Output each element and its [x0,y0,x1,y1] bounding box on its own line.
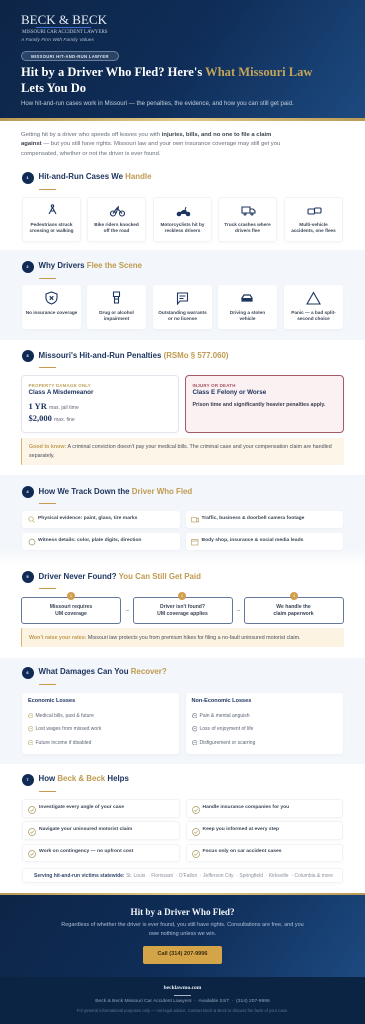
card: stolen vehicle: vehicle [240,316,255,321]
title: Lets You Do [21,80,86,94]
step 2 box: UM coverage applies [157,611,208,617]
eyebrow pill: MISSOURI HIT-AND-RUN LAWYER [31,54,109,58]
heading: Driver Never Found? You Can Still Get Paid [38,572,201,580]
card: multi-vehicle: Multi-vehicle [299,222,328,227]
icon: folder [191,539,198,546]
stat: jail time: 1 YR max. jail time [28,401,79,411]
step 3 number [290,592,298,600]
benefit: investigate [22,799,180,818]
panel: felony: Class E Felony or Worse [192,389,266,396]
intro paragraph: against — but you still have rights. Missouri law and your own insurance coverage may still get you [21,141,280,147]
card: no insurance: No insurance coverage [26,310,77,315]
CTA text: Regardless of whether the driver is ever found, you still have rights. Consultations are free, and you [61,922,304,928]
card: multi-vehicle: accidents, one flees [291,228,336,233]
heading: How Beck & Beck Helps [38,774,129,783]
CTA text: owe nothing unless we win. [149,931,216,937]
step 2 box: Driver isn't found? [160,604,205,610]
card: panic: Panic — a bad split- [291,310,336,315]
card: stolen vehicle: Driving a stolen [230,310,265,315]
intro paragraph [21,132,280,157]
card: panic: second choice [297,316,330,321]
list item: pain: Pain & mental anguish [200,712,250,718]
benefit: insurance companies [186,799,343,818]
step 1 number [67,592,75,600]
section 1: cases we handle [22,172,343,242]
subtitle: How hit-and-run cases work in Missouri — the penalties, the evidence, and how you can still get paid. [21,100,294,107]
icon: pedestrian [48,204,56,214]
title [21,65,312,94]
benefit: investigate: Investigate every angle of your case [39,804,124,810]
step badge 4 [22,486,34,498]
call button [143,946,222,964]
card: stolen vehicle [218,285,277,329]
panel: felony: Prison time and significantly heavier penalties apply. [192,402,325,408]
item: witness details [22,533,180,550]
stat: fine: $2,000 max. fine [28,413,75,423]
panel: misdemeanor: Class A Misdemeanor [28,389,93,396]
callout: good to know: Good to know: A criminal conviction doesn't pay your medical bills. The criminal case and your compensation claim are handled [29,444,332,450]
callout: rates: Won't raise your rates: Missouri law protects you from premium hikes for filing a no-fault uninsured motorist claim. [29,634,301,640]
section 6: damages [0,658,365,764]
benefit: keep informed: Keep you informed at every step [202,826,279,832]
icon: bicycle [110,206,125,216]
CTA heading: Hit by a Driver Who Fled? [130,907,234,917]
benefit: keep informed [186,821,343,840]
panel: misdemeanor: PROPERTY DAMAGE ONLY [28,382,91,388]
callout: rates [21,628,344,647]
step badge 5: 5 [26,574,29,578]
card: trucks [218,197,277,242]
icon: motorcycle [176,206,190,216]
step 2 box [132,596,232,624]
header banner [0,0,365,121]
icon: two vehicles [307,208,322,214]
benefit: insurance companies: Handle insurance companies for you [202,804,289,810]
panel: non-economic losses [186,692,343,754]
step 1 number: 1 [70,594,72,598]
section 2: why drivers flee [0,250,365,340]
step badge 7 [22,774,34,786]
icon: camera [191,517,199,523]
heading: What Damages Can You Recover? [38,667,167,676]
card: motorcyclists [153,197,212,242]
section 3: penalties [21,350,344,465]
heading: Why Drivers Flee the Scene [38,261,142,270]
disclaimer: For general informational purposes only — not legal advice. Contact Beck & Beck to discuss the facts of your case. [77,1008,288,1013]
benefit: contingency: Work on contingency — no upfront cost [39,849,133,854]
call to action panel [0,895,365,977]
list item: medical bills: Medical bills, past & future [36,712,94,718]
heading: Missouri's Hit-and-Run Penalties (RSMo § 577.060) [38,351,228,360]
step 1 box [21,596,121,624]
panel: non-economic losses: Non-Economic Losses [192,698,251,704]
step 1 box: Missouri requires [50,604,92,610]
card: pedestrians: Pedestrians struck [31,222,72,227]
benefit: contingency [22,844,180,862]
logo: BECK & BECK [21,12,107,27]
footer [0,977,365,1024]
arrow to step 2 [126,609,128,612]
call button: Call (314) 207-9996 [157,951,208,957]
step badge 1: 1 [26,174,29,180]
card: warrants: Outstanding warrants [158,310,207,315]
card: impairment: impairment [104,316,129,321]
card: bike riders [87,197,146,242]
item: physical evidence [22,511,180,528]
step 3 box: claim paperwork [273,611,314,617]
step badge 7: 7 [26,776,29,782]
panel: economic losses [22,692,179,754]
heading: How We Track Down the Driver Who Fled [38,486,192,496]
arrow to step 3 [237,609,240,612]
panel: felony: INJURY OR DEATH [192,382,236,388]
card: multi-vehicle [284,197,343,242]
card: warrants [153,285,212,329]
step 3 box [244,596,344,624]
list item: enjoyment: Loss of enjoyment of life [200,726,253,732]
item: body shop leads [186,533,343,550]
benefit: focus: Focus only on car accident cases [202,849,282,854]
icon: speech circle [28,538,36,546]
card: trucks: Truck crashes where [224,222,271,227]
callout: good to know [21,438,344,465]
icon: speech bubble [176,292,188,305]
step badge 6 [22,666,34,678]
service area strip [22,868,343,883]
card: warrants: or no license [168,316,197,321]
item: body shop leads: Body shop, insurance & social media leads [202,538,303,542]
step badge 2: 2 [26,264,29,268]
CTA text [61,922,304,937]
card: motorcyclists: Motorcyclists hit by [160,222,205,227]
panel: felony [185,375,344,433]
logo: A Family Firm With Family Values [21,38,94,42]
step badge 5 [22,570,34,582]
panel: misdemeanor [21,375,179,433]
gold rule [0,118,365,121]
card: pedestrians [22,197,81,242]
step badge 2 [22,260,34,272]
card: impairment: Drug or alcohol [99,310,134,315]
logo [20,12,108,42]
callout: good to know: separately. [29,452,55,458]
card: motorcyclists: reckless drivers [165,228,200,233]
icon: warning triangle [306,292,321,304]
service area strip: Serving hit-and-run victims statewide: St. Louis · Florissant · O'Fallon · Jefferson City · Springfield · Kirksville · Columbia & more [34,873,333,879]
icon: truck [241,206,256,216]
gold rule above call to action [0,893,365,895]
section 5: driver never found [21,571,344,647]
step badge 1 [22,172,34,184]
step 2 number: 2 [181,594,183,598]
section 4: tracking the driver [0,475,365,565]
card: pedestrians: crossing or walking [29,228,74,233]
logo: MISSOURI CAR ACCIDENT LAWYERS [22,30,108,35]
intro paragraph: compensated, whether or not the driver is ever found. [21,151,160,157]
contact line: Beck & Beck Missouri Car Accident Lawyers · Available 24/7 · (314) 207-9996 [95,999,270,1004]
step badge 3: 3 [26,353,29,358]
item: camera footage: Traffic, business & doorbell camera footage [202,516,304,520]
step 2 number [178,592,186,600]
benefit: navigate [22,821,180,840]
benefit: navigate: Navigate your uninsured motorist claim [39,826,132,832]
card: impairment [87,285,146,329]
item: physical evidence: Physical evidence: paint, glass, tire marks [38,516,137,520]
benefit: focus [186,844,343,862]
item: camera footage [186,511,343,528]
card: bike riders: off the road [104,228,129,233]
card: panic [284,285,343,329]
step 3 box: We handle the [276,604,311,610]
item: witness details: Witness details: color, plate digits, direction [38,538,141,542]
title: Hit by a Driver Who Fled? Here's What Missouri Law [21,65,312,79]
list item: disfigurement: Disfigurement or scarring [200,740,255,746]
intro paragraph: Getting hit by a driver who speeds off leaves you with injuries, bills, and no one to file a claim [21,132,271,138]
step badge 6: 6 [26,670,29,674]
step 3 number: 3 [293,594,295,598]
site name: becklawmo.com [164,985,201,991]
icon: magnifier [28,516,35,523]
step badge 4: 4 [26,488,29,494]
card: bike riders: Bike riders knocked [94,222,139,227]
icon: car [241,294,253,302]
card: no insurance [22,285,81,329]
step 1 box: UM coverage [55,611,87,617]
eyebrow pill [21,51,119,61]
card: trucks: drivers flee [235,228,260,233]
icon: bottle [112,292,120,304]
list item: future income: Future income if disabled [36,740,91,746]
step badge 3 [22,350,34,362]
list item: lost wages: Lost wages from missed work [36,726,101,732]
heading: Hit-and-Run Cases We Handle [38,172,151,181]
icon: shield [45,291,58,305]
section 7: how beck and beck helps [22,774,343,883]
panel: economic losses: Economic Losses [28,698,75,704]
